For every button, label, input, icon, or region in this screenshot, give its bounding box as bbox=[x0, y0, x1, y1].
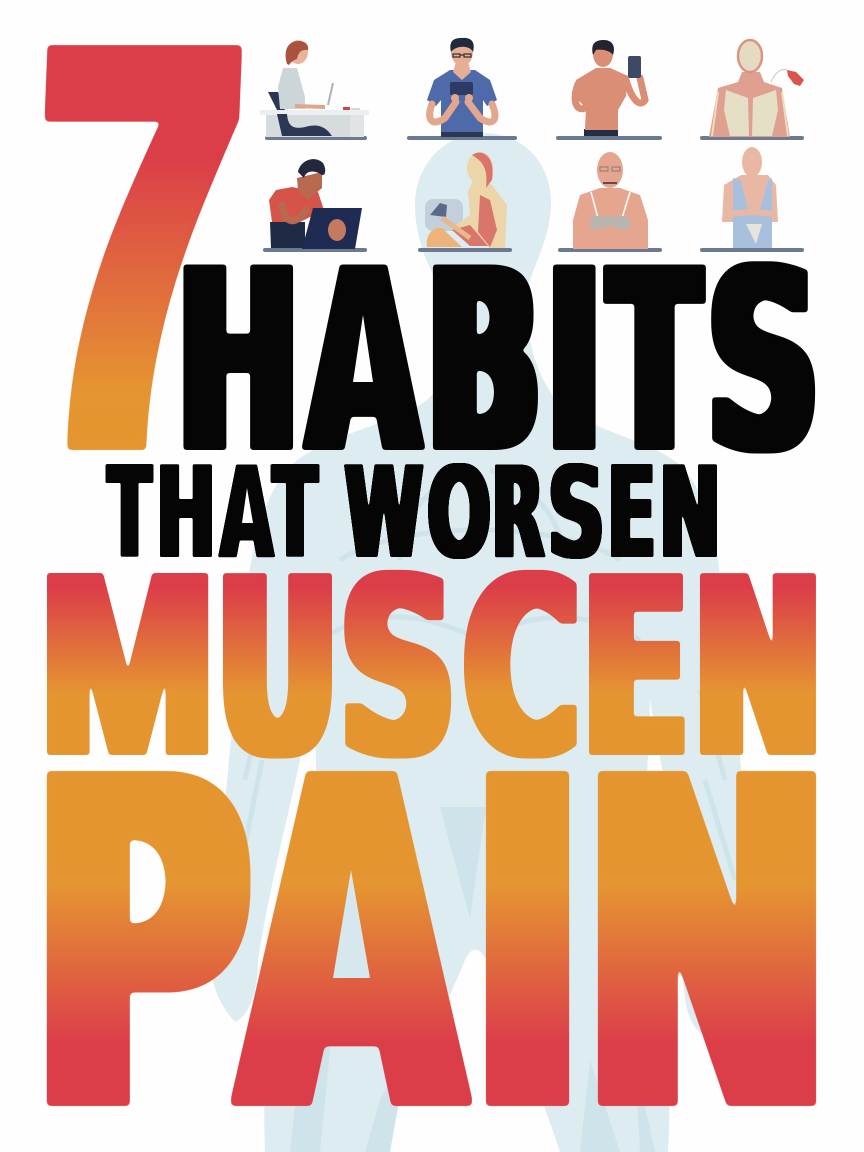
heading: THAT WORSEN: O bbox=[427, 440, 491, 586]
background body silhouette bbox=[210, 133, 748, 1152]
heading: THAT WORSEN: E bbox=[608, 440, 656, 586]
heading: HABITS: H bbox=[178, 217, 298, 507]
icon: man looking at tablet bbox=[407, 38, 517, 140]
heading: HABITS: A bbox=[309, 217, 418, 507]
heading: THAT WORSEN: A bbox=[221, 440, 272, 586]
heading: HABITS: T bbox=[610, 217, 699, 507]
heading: MUSCEN: C bbox=[464, 527, 579, 811]
heading: MUSCEN: U bbox=[217, 527, 338, 811]
heading: THAT WORSEN: T bbox=[108, 440, 151, 586]
heading: MUSCEN: S bbox=[341, 527, 455, 811]
habit illustrations bbox=[260, 38, 804, 252]
icon: person working at desk bbox=[260, 40, 369, 140]
icon: man with blue vest bbox=[700, 147, 804, 252]
heading: THAT WORSEN: H bbox=[156, 440, 215, 586]
heading: MUSCEN: E bbox=[583, 527, 688, 811]
heading: HABITS: I bbox=[548, 217, 601, 507]
heading: PAIN bbox=[34, 686, 829, 1152]
icon: shirtless man holding phone bbox=[556, 40, 662, 140]
heading: HABITS bbox=[178, 217, 818, 507]
heading: THAT WORSEN: S bbox=[548, 440, 605, 586]
heading: THAT WORSEN: W bbox=[345, 440, 423, 586]
heading: THAT WORSEN: R bbox=[492, 440, 544, 586]
heading: THAT WORSEN: T bbox=[273, 440, 317, 586]
icon: man hunched over laptop bbox=[263, 159, 367, 252]
icon: anatomical torso with red device bbox=[700, 40, 804, 140]
icon: bald man with glasses, hands together bbox=[558, 152, 662, 252]
icon: anatomical side view with tablet bbox=[418, 152, 512, 252]
heading: MUSCEN: M bbox=[41, 519, 214, 808]
heading: MUSCEN bbox=[41, 519, 822, 811]
heading: THAT WORSEN bbox=[108, 440, 721, 586]
heading: THAT WORSEN: N bbox=[659, 440, 721, 586]
heading: HABITS: B bbox=[427, 217, 540, 507]
